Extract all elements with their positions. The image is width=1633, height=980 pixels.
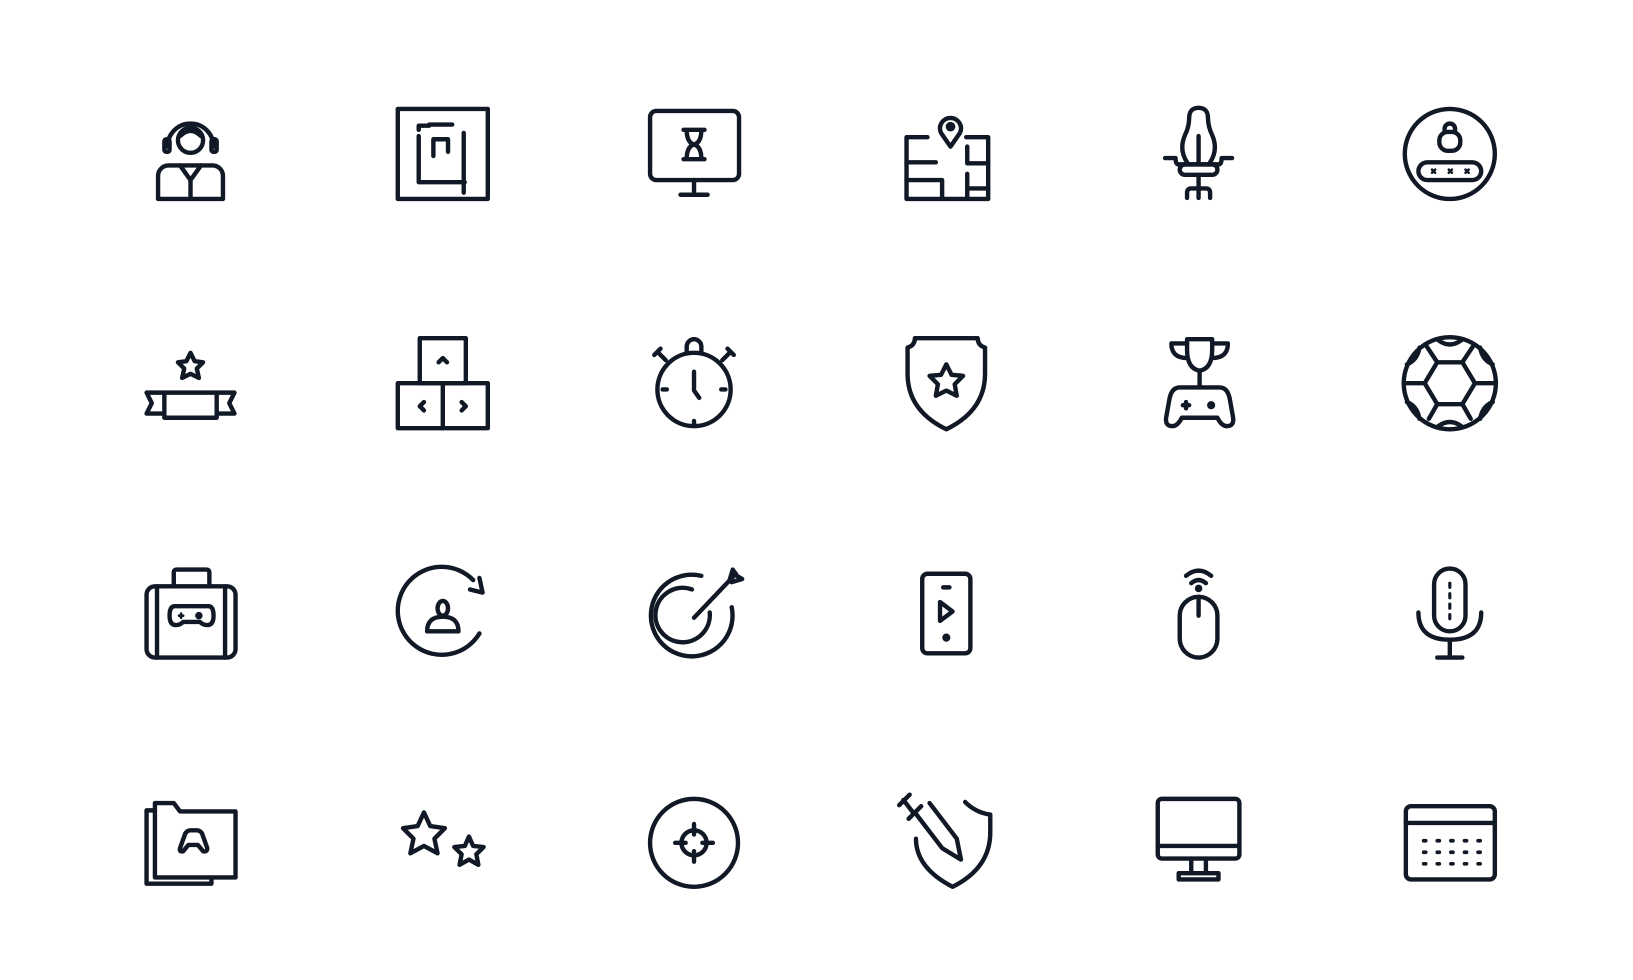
icon: target arrow xyxy=(651,570,742,656)
icon: game case xyxy=(147,570,236,658)
icon: maze xyxy=(398,109,488,199)
icon: shield star xyxy=(908,338,985,429)
icon: phone video xyxy=(922,574,970,653)
icon: game folder xyxy=(147,803,236,884)
icon: soccer ball xyxy=(1404,337,1496,429)
icon: wireless mouse xyxy=(1180,571,1217,658)
icon: password lock xyxy=(1405,109,1495,199)
icon: arrow keys xyxy=(398,338,488,428)
icon: support agent xyxy=(158,124,223,199)
icon: trophy controller xyxy=(1166,339,1233,426)
icon: star ribbon xyxy=(147,353,234,418)
icon: monitor hourglass xyxy=(650,111,739,195)
icon: desktop monitor xyxy=(1158,799,1239,879)
icon: shield sword xyxy=(899,795,990,887)
icon: stars xyxy=(403,812,484,865)
icon: gaming chair xyxy=(1165,108,1232,198)
icon: map pin xyxy=(907,118,988,199)
icon: microphone xyxy=(1418,569,1481,658)
icon: account refresh xyxy=(398,567,483,655)
icon: stopwatch xyxy=(654,339,734,426)
icon: crosshair xyxy=(650,799,738,887)
icon: calendar xyxy=(1406,806,1495,879)
